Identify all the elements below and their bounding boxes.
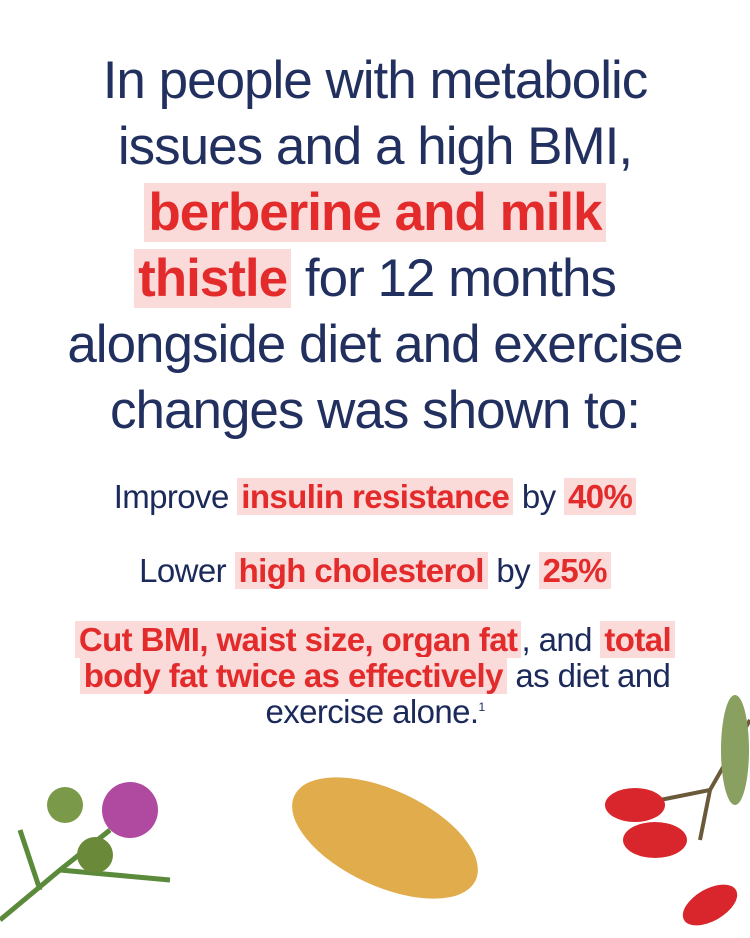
title: berberine and milk [148,183,602,242]
stat: body fat: body fat twice as effectively as diet and [84,657,670,694]
title [67,51,683,440]
image: berries [605,695,750,926]
title: changes was shown to: [110,381,640,440]
image: thistle [0,782,170,922]
title: In people with metabolic [103,51,647,110]
title: alongside diet and exercise [67,315,683,374]
title: thistle for 12 months [138,249,616,308]
stat: cholesterol: Lower high cholesterol by 25% [139,552,607,589]
stat: body fat: Cut BMI, waist size, organ fat, and total [79,621,671,658]
image: pill [292,777,478,899]
stat: body fat: exercise alone.1 [265,693,485,730]
stat: insulin: Improve insulin resistance by 40% [114,478,632,515]
stat: body fat [75,621,675,730]
title: issues and a high BMI, [118,117,632,176]
